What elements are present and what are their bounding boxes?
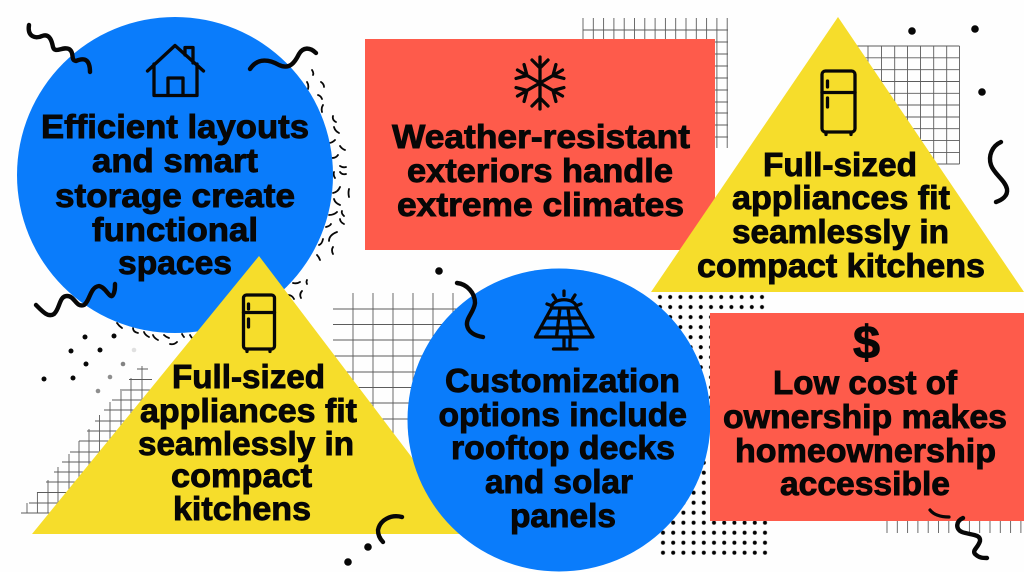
- squiggle: top of circle right: [250, 49, 316, 69]
- icon: dollar sign: $: [853, 316, 880, 368]
- squiggle: arc bottom: [378, 516, 402, 542]
- text: full-sized appliances: [697, 147, 985, 285]
- scattered dots: top right and bottom: [344, 25, 986, 566]
- text: weather resistant: [392, 119, 690, 224]
- text: low cost: accessible: [780, 466, 950, 503]
- grid pattern: top right: [855, 46, 960, 164]
- icon: fridge: [244, 295, 274, 352]
- grid ticks: bottom right: [887, 515, 1021, 533]
- text: low cost: [723, 365, 1007, 503]
- text: efficient layouts: spaces: [118, 245, 232, 282]
- squiggle: centre curve: [457, 283, 483, 337]
- squiggle: bottom right dash: [930, 510, 949, 517]
- text: customization: and solar: [485, 464, 633, 501]
- text: customization: options include: [438, 397, 687, 434]
- panel: red box, low cost: [710, 313, 1024, 521]
- text: full-sized appliances: seamlessly in: [732, 214, 949, 251]
- grid pattern: centre: [333, 293, 460, 450]
- text: full-sized appliances: kitchens: [173, 491, 311, 528]
- text: customization: Customization: [445, 363, 680, 400]
- squiggle: lower left wave: [36, 284, 115, 315]
- grid pattern: lower left stairs: [21, 366, 152, 513]
- panel: blue circle, efficient layouts: [17, 17, 333, 333]
- panel: blue circle, customization: [408, 268, 710, 572]
- text: weather resistant: Weather-resistant: [392, 119, 690, 156]
- icon: fridge: [822, 71, 855, 134]
- icon: house: [148, 46, 204, 96]
- text: weather resistant: extreme climates: [397, 187, 684, 224]
- text: full-sized appliances: [138, 359, 357, 528]
- text: customization: panels: [510, 498, 616, 535]
- text: low cost: homeownership: [735, 433, 996, 470]
- text: full-sized appliances: Full-sized: [763, 147, 917, 184]
- confetti dashes around circle: [117, 70, 349, 344]
- text: customization: rooftop decks: [451, 430, 675, 467]
- squiggle: bottom right: [957, 518, 987, 558]
- squiggle: right side: [990, 142, 1007, 202]
- text: efficient layouts: [41, 109, 309, 282]
- text: full-sized appliances: compact: [171, 458, 312, 495]
- text: full-sized appliances: Full-sized: [172, 359, 325, 396]
- icon: snowflake: [513, 57, 567, 109]
- dot matrix: upper: [655, 292, 767, 430]
- icon: solar panel: [536, 291, 593, 349]
- text: full-sized appliances: seamlessly in: [138, 426, 354, 463]
- panel: yellow triangle, top right: [651, 17, 1024, 292]
- text: low cost: Low cost of: [773, 365, 958, 402]
- text: efficient layouts: and smart: [92, 143, 258, 180]
- panel: red box, weather resistant: [365, 39, 715, 250]
- text: full-sized appliances: compact kitchens: [697, 248, 985, 285]
- text: low cost: ownership makes: [723, 399, 1007, 436]
- text: customization: [438, 363, 687, 535]
- text: efficient layouts: Efficient layouts: [41, 109, 309, 146]
- text: efficient layouts: functional: [92, 212, 258, 249]
- text: weather resistant: exteriors handle: [407, 153, 673, 190]
- text: full-sized appliances: appliances fit: [732, 180, 950, 217]
- text: efficient layouts: storage create: [55, 178, 295, 215]
- panel: yellow triangle, lower left: [32, 256, 470, 534]
- scattered dots: lower left: [42, 334, 136, 393]
- dot matrix: lower: [658, 430, 770, 558]
- squiggle: top left: [29, 25, 90, 72]
- text: full-sized appliances: appliances fit: [140, 393, 357, 430]
- grid pattern: top centre: [583, 18, 728, 148]
